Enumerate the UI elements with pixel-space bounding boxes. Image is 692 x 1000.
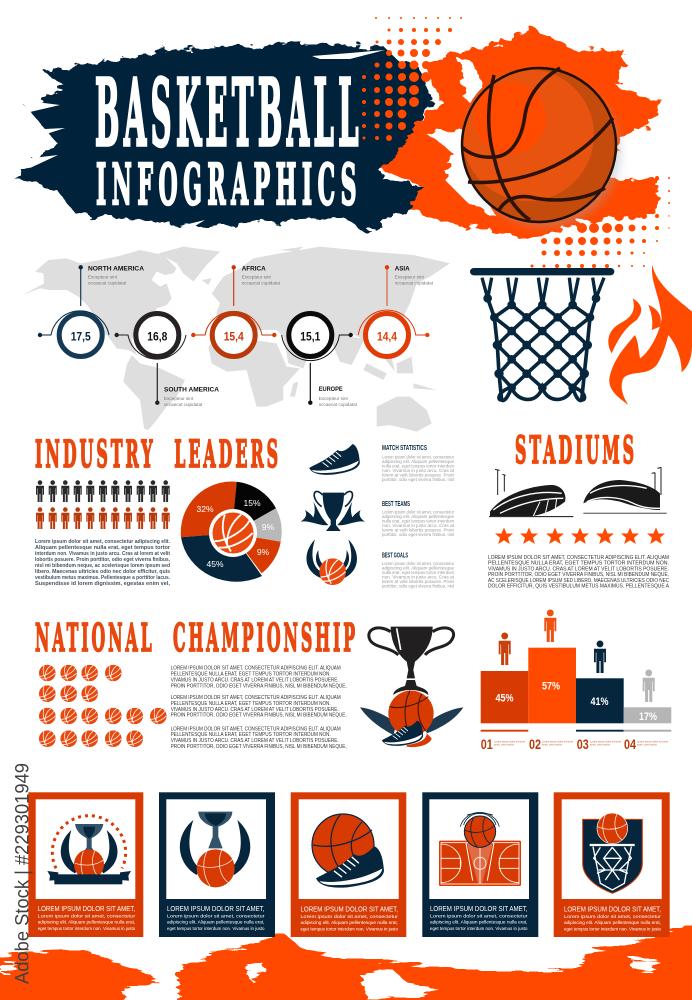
card 2: winged ball emblem: LOREM IPSUM DOLOR SIT AMET, [167, 904, 264, 913]
text block: best goals: BEST GOALS [382, 552, 408, 560]
icon: winged trophy ball [180, 812, 250, 887]
text block: match statistics: non. Vivamus in justo arcu. Cras at [382, 468, 455, 473]
ranking: europe 15,1: EUROPE [319, 386, 343, 393]
podium bar chart: amet, cons ectetur [494, 744, 514, 746]
card 3: ball and sneaker: LOREM IPSUM DOLOR SIT AMET, [300, 904, 398, 914]
card 3: ball and sneaker [291, 792, 406, 937]
card 4: court and ball: LOREM IPSUM DOLOR SIT AMET, [430, 904, 528, 913]
podium bar chart: amet, cons ectetur [637, 744, 657, 746]
text block: championship body: LOREM IPSUM DOLOR SIT AMET, CONSECTETUR ADIPISCING ELIT. ALIQUAM [171, 726, 341, 732]
icon: ball with sneaker [312, 814, 384, 888]
text block: best teams [382, 501, 455, 537]
text block: industry leaders body [35, 539, 171, 587]
card 1: emblem with stars and banner: adipiscing elit. Aliquam pellentesque nulla erat, [38, 920, 135, 926]
card 1: emblem with stars and banner: Lorem ipsum dolor sit amet, consectetur [38, 914, 136, 920]
text block: match statistics: Lorem ipsum dolor sit amet, consectetur [382, 454, 455, 460]
rating stars [495, 528, 665, 544]
podium bar chart: Lorem ipsum dolor sit amet [637, 740, 668, 744]
ranking: south america 16,8 [114, 314, 219, 407]
text block: industry leaders body: libero. Maecenas ultricies odio nec dolor efficitur, quis [35, 569, 170, 575]
card 5: hoop shield: Lorem ipsum dolor sit amet, consectetur [564, 914, 661, 920]
podium bar chart: 03 [577, 736, 589, 752]
orange paint splash behind ball [380, 27, 666, 240]
card 3: ball and sneaker: eget tempus tortor interdum non. Vivamus in justo [300, 926, 398, 932]
text block: best goals [382, 552, 455, 588]
text block: best goals: nulla erat, eget tempus tortor interdum [382, 570, 454, 575]
ranking: europe 15,1: Excepteur sint [319, 396, 349, 401]
card 4: court and ball: eget tempus tortor interdum non. Vivamus in justo [430, 926, 528, 932]
podium bar chart: 17% [639, 711, 657, 723]
ranking: asia 14,4: ASIA [395, 266, 410, 272]
podium bar chart: 45% [496, 692, 514, 704]
text block: championship body: PROIN PORTTITOR, ODIO EGET VIVERRA FINIBUS, NISL MI BIBENDUM NEQUE, [171, 684, 347, 690]
ranking: asia 14,4: occaecat cupidatat [395, 280, 434, 286]
text block: best goals: lorem at velit lobortis posuere. Proin [382, 579, 455, 584]
ranking: africa 15,4: AFRICA [242, 266, 266, 272]
text block: championship body: PROIN PORTTITOR, ODIO EGET VIVERRA FINIBUS, NISL MI BIBENDUM NEQUE, [171, 713, 347, 719]
text block: stadiums body: PELLENTESQUE NULLA ERAT, EGET TEMPUS TORTOR INTERDUM NON. [488, 561, 669, 567]
icon: shield with hoop and ball [583, 813, 642, 893]
podium bar chart [481, 609, 671, 752]
card 2: winged ball emblem: Lorem ipsum dolor sit amet, consectetur [167, 914, 265, 920]
text block: industry leaders body: interdum non. Vivamus in justo arcu. Cras at lorem at velit [35, 551, 170, 557]
pie chart [181, 481, 282, 582]
card 2: winged ball emblem: adipiscing elit. Aliquam pellentesque nulla erat, [167, 920, 264, 926]
podium bar chart: 01 [481, 736, 493, 752]
ranking: south america 16,8: 16,8 [147, 330, 168, 344]
ranking: africa 15,4: Excepteur sint [242, 274, 272, 280]
text block: best teams: porttitor, odio eget viverra finibus, nisl [382, 532, 454, 537]
ranking: south america 16,8: Excepteur sint [164, 396, 194, 401]
card 1: emblem with stars and banner: LOREM IPSUM DOLOR SIT AMET, [38, 904, 135, 913]
ranking: europe 15,1: 15,1 [300, 330, 321, 344]
ranking: north america 17,5 [38, 265, 144, 356]
ranking: south america 16,8: SOUTH AMERICA [164, 387, 219, 394]
pie chart: 32% [196, 504, 214, 514]
text block: championship body: PELLENTESQUE NULLA ERAT, EGET TEMPUS TORTOR INTERDUM NON. [171, 732, 331, 738]
icon: winged ball [306, 539, 357, 585]
text block: best goals: non. Vivamus in justo arcu. Cras at [382, 574, 455, 580]
pictogram: people rows [36, 480, 170, 529]
text block: best teams: Lorem ipsum dolor sit amet, consectetur [382, 510, 455, 514]
text block: industry leaders body: nisl mi bibendum neque, ac scelerisque lorem ipsum sed [35, 563, 170, 569]
text block: match statistics: adipiscing elit. Aliquam pellentesque [382, 459, 455, 464]
text block: industry leaders body: Suspendisse id lorem dignissim, egestas enim vel, [35, 581, 171, 587]
podium bar chart: Lorem ipsum dolor sit amet [590, 740, 621, 744]
text block: championship body [171, 666, 347, 750]
ranking: africa 15,4 [191, 265, 281, 356]
text block: championship body: LOREM IPSUM DOLOR SIT AMET, CONSECTETUR ADIPISCING ELIT. ALIQUAM [171, 666, 341, 672]
card 5: hoop shield: adipiscing elit. Aliquam pellentesque nulla erat, [564, 920, 661, 926]
card 1: emblem with stars and banner [28, 792, 143, 937]
text block: industry leaders body: Lorem ipsum dolor sit amet, consectetur adipiscing elit. [35, 539, 171, 545]
ranking: south america 16,8: occaecat cupidatat [164, 402, 203, 407]
icon: big trophy with winged ball and sneaker [360, 627, 463, 747]
ranking: europe 15,1: occaecat cupidatat [319, 402, 358, 407]
text block: stadiums body: VIVAMUS IN JUSTO ARCU. CRAS AT LOREM AT VELIT LOBORTIS POSUERE. [488, 566, 669, 572]
text block: championship body: VIVAMUS IN JUSTO ARCU. CRAS AT LOREM AT VELIT LOBORTIS POSUERE. [171, 678, 339, 684]
podium bar chart: 04 [624, 736, 636, 752]
card 2: winged ball emblem: eget tempus tortor interdum non. Vivamus in justo [167, 926, 265, 932]
text block: best goals: porttitor, odio eget viverra finibus, nisl [382, 584, 454, 588]
podium bar chart: 41% [590, 696, 609, 708]
text block: best goals: adipiscing elit. Aliquam pellentesque [382, 566, 455, 570]
text block: championship body: LOREM IPSUM DOLOR SIT AMET, CONSECTETUR ADIPISCING ELIT. ALIQUAM [171, 695, 341, 701]
pie chart: 9% [257, 547, 270, 557]
text block: match statistics: nulla erat, eget tempus tortor interdum [382, 464, 454, 468]
text: INDUSTRY LEADERS [35, 432, 281, 476]
ranking: north america 17,5: Excepteur sint [88, 274, 118, 280]
text block: best teams: non. Vivamus in justo arcu. Cras at [382, 523, 455, 528]
text block: match statistics [382, 445, 455, 482]
ranking: asia 14,4: Excepteur sint [395, 274, 425, 280]
halftone dots [362, 17, 670, 268]
card 4: court and ball: adipiscing elit. Aliquam pellentesque nulla erat, [430, 920, 528, 926]
icon: flame [608, 265, 692, 405]
navy brush stroke [13, 43, 432, 233]
world map [23, 247, 450, 432]
text block: best teams: BEST TEAMS [382, 501, 410, 508]
ranking: north america 17,5: occaecat cupidatat [88, 280, 127, 286]
card 1: emblem with stars and banner: eget tempus tortor interdum non. Vivamus in justo [38, 926, 135, 932]
pictogram: basketball rows [39, 665, 167, 747]
icon: stadiums [489, 467, 667, 517]
pie chart: 45% [206, 559, 224, 569]
text block: championship body: VIVAMUS IN JUSTO ARCU. CRAS AT LOREM AT VELIT LOBORTIS POSUERE. [171, 738, 339, 744]
text block: industry leaders body: vestibulum metus maximus. Pellentesque a porttitor lacus. [35, 575, 171, 581]
orange blob by ball [617, 177, 660, 218]
text block: industry leaders body: lobortis posuere. Proin porttitor, odio eget viverra finibus, [35, 557, 171, 563]
vertical stock id label: Adobe Stock | #229301949 [12, 763, 34, 984]
card 4: court and ball [422, 792, 538, 937]
text block: stadiums body [488, 555, 669, 590]
title [95, 59, 363, 218]
podium bar chart: Lorem ipsum dolor sit amet [494, 740, 525, 744]
text block: match statistics: MATCH STATISTICS [382, 445, 427, 452]
ranking: north america 17,5: 17,5 [71, 330, 91, 344]
bottom orange brush [0, 927, 692, 1000]
ranking: africa 15,4: occaecat cupidatat [242, 280, 281, 286]
text block: match statistics: lorem at velit lobortis posuere. Proin [382, 472, 455, 478]
text block: championship body: PELLENTESQUE NULLA ERAT, EGET TEMPUS TORTOR INTERDUM NON. [171, 701, 331, 707]
text block: stadiums body: DOLOR EFFICITUR, QUIS VESTIBULUM METUS MAXIMUS. PELLENTESQUE A [488, 584, 669, 590]
text block: industry leaders body: Aliquam pellentesque nulla erat, eget tempus tortor [35, 545, 170, 551]
text block: best teams: adipiscing elit. Aliquam pellentesque [382, 514, 455, 519]
text block: match statistics: porttitor, odio eget viverra finibus, nisl [382, 477, 454, 482]
text block: championship body: VIVAMUS IN JUSTO ARCU. CRAS AT LOREM AT VELIT LOBORTIS POSUERE. [171, 707, 339, 713]
ranking: africa 15,4: 15,4 [224, 330, 244, 344]
card 2: winged ball emblem [159, 792, 275, 937]
icon: basketball hoop [474, 272, 611, 401]
card 5: hoop shield [554, 792, 670, 937]
text block: best teams: lorem at velit lobortis posuere. Proin [382, 528, 455, 532]
podium bar chart: amet, cons ectetur [542, 744, 562, 746]
text block: championship body: PELLENTESQUE NULLA ERAT, EGET TEMPUS TORTOR INTERDUM NON. [171, 672, 331, 678]
podium bar chart: Lorem ipsum dolor sit amet [542, 740, 573, 744]
card 5: hoop shield: eget tempus tortor interdum non. Vivamus in justo [564, 926, 661, 932]
text block: best teams: nulla erat, eget tempus tortor interdum [382, 518, 454, 524]
ranking: north america 17,5: NORTH AMERICA [88, 266, 144, 272]
card 4: court and ball: Lorem ipsum dolor sit amet, consectetur [430, 914, 528, 920]
ranking: asia 14,4 [358, 265, 434, 356]
pie chart: 15% [243, 498, 261, 508]
icon: sneaker [309, 444, 360, 475]
card 3: ball and sneaker: adipiscing elit. Aliquam pellentesque nulla erat, [300, 920, 398, 926]
podium bar chart: 02 [529, 736, 541, 752]
text block: best goals: Lorem ipsum dolor sit amet, consectetur [382, 561, 455, 566]
icon: star wreath emblem [47, 816, 131, 884]
podium bar chart: 57% [542, 680, 560, 692]
text block: championship body: PROIN PORTTITOR, ODIO EGET VIVERRA FINIBUS, NISL MI BIBENDUM NEQUE, [171, 744, 347, 750]
podium bar chart: amet, cons ectetur [590, 744, 610, 746]
pie chart: 9% [262, 522, 275, 532]
card 3: ball and sneaker: Lorem ipsum dolor sit amet, consectetur [300, 914, 398, 920]
ranking: europe 15,1 [282, 314, 358, 407]
icon: trophy with flames [301, 491, 365, 531]
card 5: hoop shield: LOREM IPSUM DOLOR SIT AMET, [564, 904, 661, 914]
icon: basketball court [439, 812, 521, 886]
basketball [462, 68, 620, 226]
ranking: asia 14,4: 14,4 [377, 330, 397, 344]
